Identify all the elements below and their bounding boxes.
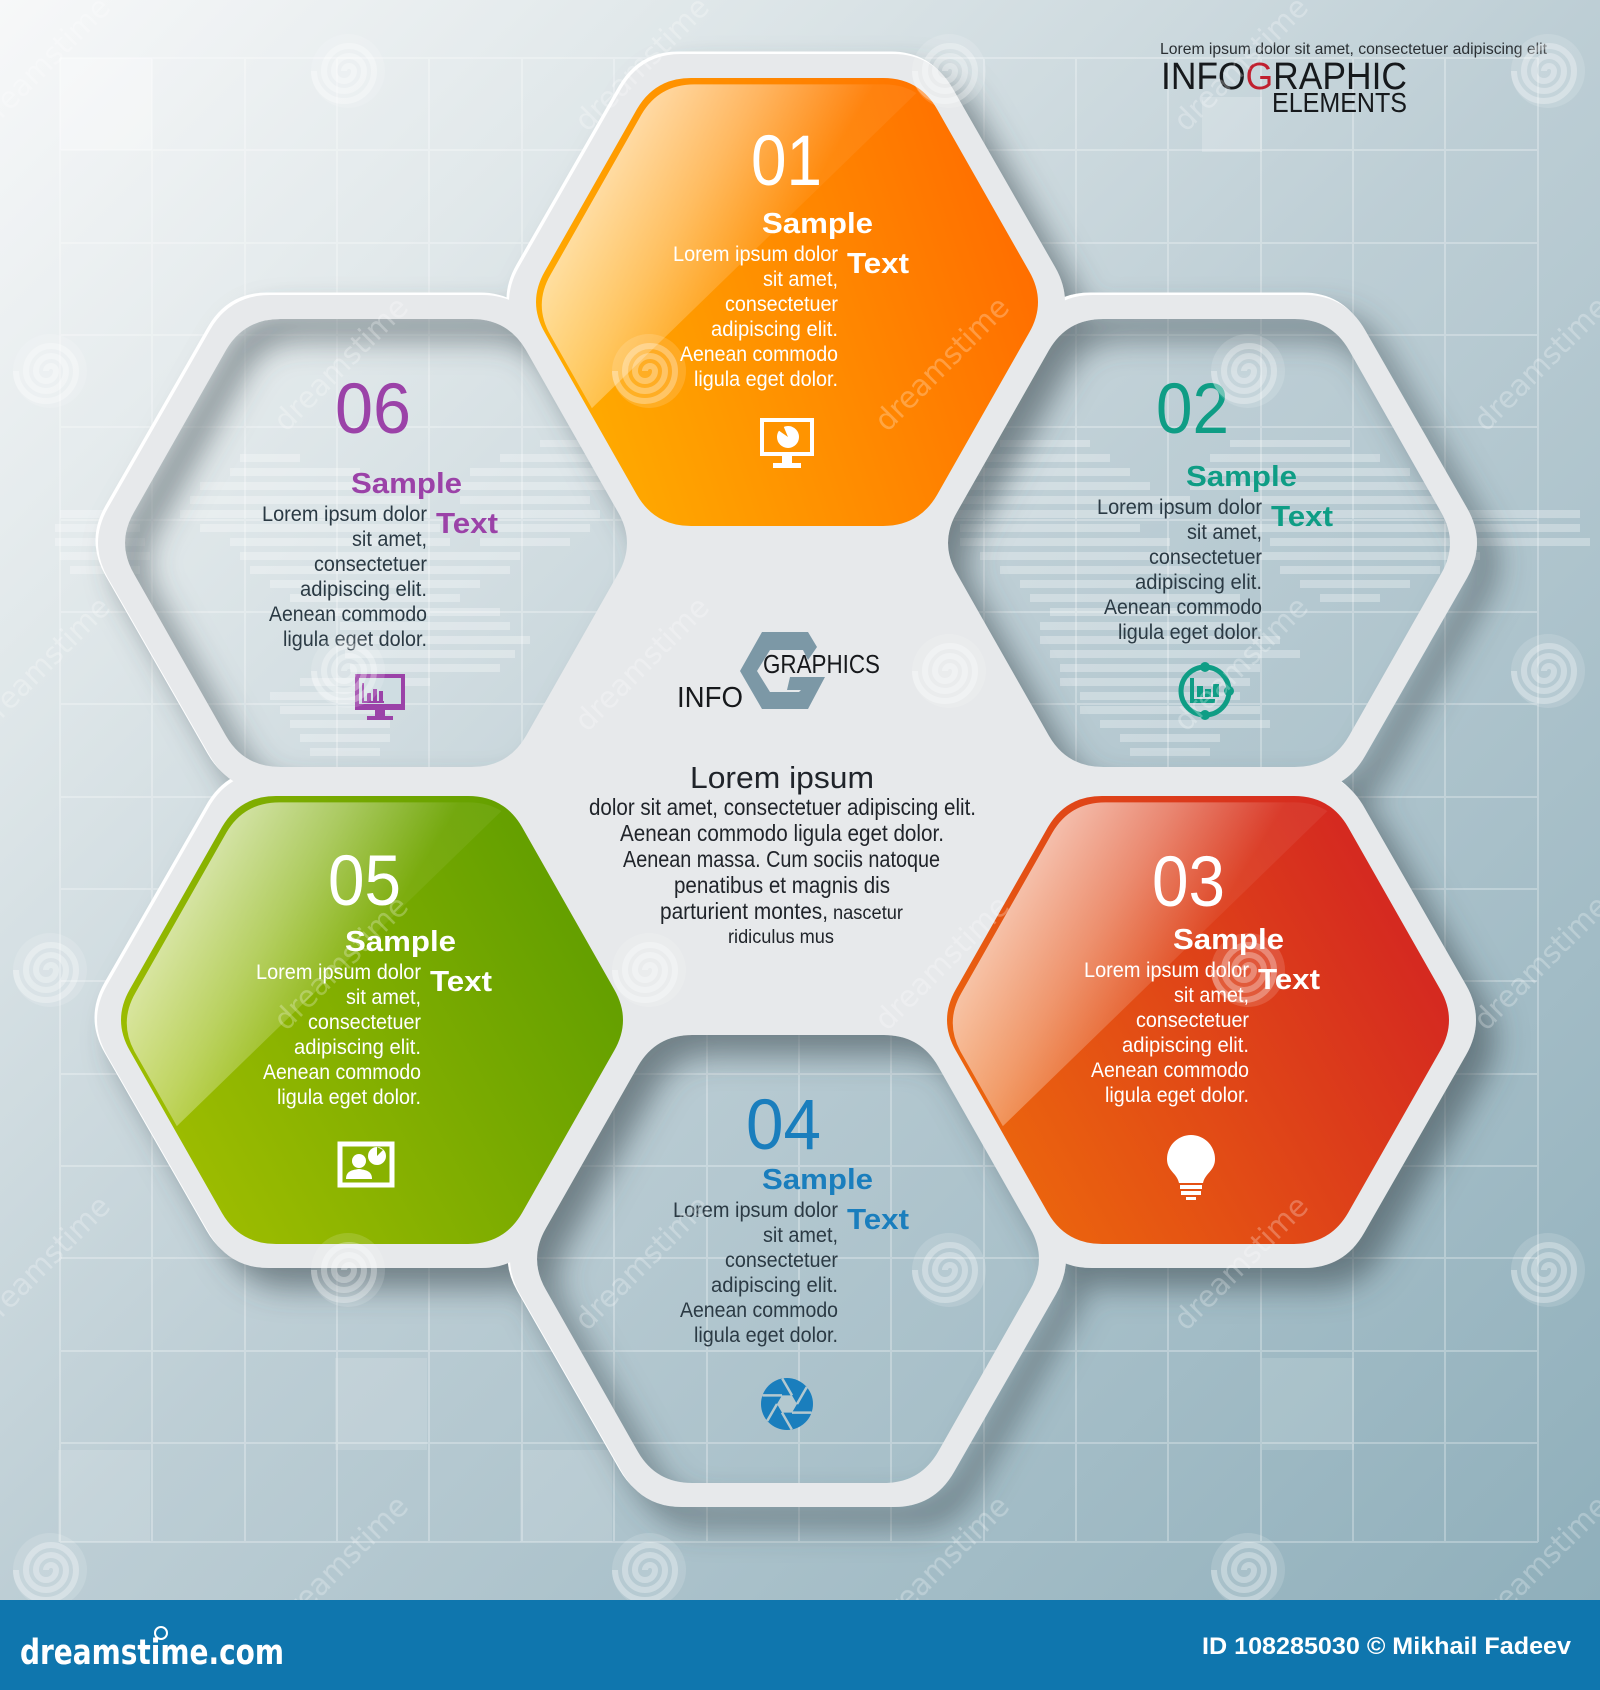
panel 02 text: Text: [1271, 501, 1333, 533]
panel 03 text: Aenean commodo: [1091, 1059, 1249, 1082]
center logo: INFO: [677, 682, 743, 714]
panel 04 text: adipiscing elit.: [711, 1274, 838, 1297]
watermark text: dreamstime: [868, 1489, 1017, 1638]
panel 06 text: consectetuer: [314, 553, 427, 576]
watermark text: dreamstime: [267, 889, 416, 1038]
panel 04 text: Lorem ipsum dolor: [673, 1199, 838, 1222]
panel 04 text: sit amet,: [763, 1224, 838, 1247]
panel 02 text: Aenean commodo: [1104, 596, 1262, 619]
panel 06 text: adipiscing elit.: [300, 578, 427, 601]
icon: monitor with bar chart: [355, 674, 405, 720]
panel 06 text: ligula eget dolor.: [283, 628, 427, 651]
orange hexagon: [536, 78, 1038, 526]
world map stripes: [55, 440, 1590, 756]
panel 01 text: Aenean commodo: [680, 343, 838, 366]
panel 02 text: sit amet,: [1187, 521, 1262, 544]
top right title: Lorem ipsum dolor sit amet, consectetuer adipiscing elit: [1160, 41, 1548, 58]
panel 02 text: ligula eget dolor.: [1118, 621, 1262, 644]
panel 05 text: Text: [430, 966, 492, 998]
panel 06 text: sit amet,: [352, 528, 427, 551]
panel 05 text: ligula eget dolor.: [277, 1086, 421, 1109]
panel 01 text: adipiscing elit.: [711, 318, 838, 341]
panel 03 text: adipiscing elit.: [1122, 1034, 1249, 1057]
panel 05 text: Lorem ipsum dolor: [256, 961, 421, 984]
panel 06 text: 06: [335, 370, 411, 449]
watermark text: dreamstime: [868, 290, 1017, 439]
panel 03 text: ligula eget dolor.: [1105, 1084, 1249, 1107]
footer bar: dreamstime.com: [20, 1633, 284, 1673]
watermark text: dreamstime: [267, 1489, 416, 1638]
panel 05 text: sit amet,: [346, 986, 421, 1009]
panel 01 text: ligula eget dolor.: [694, 368, 838, 391]
panel 01 text: 01: [751, 122, 822, 201]
panel 01 text: [673, 122, 909, 391]
panel 03 text: consectetuer: [1136, 1009, 1249, 1032]
panel 04 text: Sample: [762, 1164, 873, 1196]
icon: camera aperture: [761, 1378, 813, 1430]
watermark text: dreamstime: [868, 889, 1017, 1038]
panel 02 text: adipiscing elit.: [1135, 571, 1262, 594]
center text block: dolor sit amet, consectetuer adipiscing elit.: [589, 794, 976, 820]
center text block: Aenean massa. Cum sociis natoque: [623, 846, 940, 872]
top right title: ELEMENTS: [1272, 87, 1407, 118]
center text block: nascetur: [833, 903, 904, 924]
panel 05 text: consectetuer: [308, 1011, 421, 1034]
panel 02 text: Lorem ipsum dolor: [1097, 496, 1262, 519]
green hexagon: [121, 796, 623, 1244]
watermark text: dreamstime: [1167, 590, 1316, 739]
center text block: Aenean commodo ligula eget dolor.: [620, 820, 944, 846]
panel 02 text: Sample: [1186, 461, 1297, 493]
panel 02 text: [1097, 370, 1333, 644]
icon: light bulb: [1167, 1135, 1215, 1200]
panel 01 text: Sample: [762, 208, 873, 240]
center text block: [589, 760, 976, 948]
icon: presenter with pie chart: [340, 1144, 392, 1185]
top right title: INFOGRAPHIC: [1161, 56, 1407, 98]
panel 01 text: consectetuer: [725, 293, 838, 316]
panel 05 text: 05: [328, 842, 401, 921]
panel 05 text: Sample: [345, 926, 456, 958]
watermark text: dreamstime: [568, 590, 717, 739]
footer bar: [0, 1600, 1600, 1690]
watermark text: dreamstime: [267, 290, 416, 439]
panel 03 text: 03: [1152, 843, 1225, 922]
watermark text: dreamstime: [568, 1189, 717, 1338]
panel 03 text: [1084, 843, 1320, 1107]
panel 05 text: Aenean commodo: [263, 1061, 421, 1084]
panel 01 text: Text: [847, 248, 909, 280]
panel 03 text: Lorem ipsum dolor: [1084, 959, 1249, 982]
icon: monitor with pie chart: [760, 418, 814, 468]
top right title: [1160, 41, 1548, 118]
panel 03 text: Text: [1258, 964, 1320, 996]
panel 02 text: 02: [1156, 370, 1229, 449]
icon: ring with bar chart: [1181, 662, 1234, 720]
watermark text: dreamstime: [1167, 1189, 1316, 1338]
red hexagon: [947, 796, 1449, 1244]
panel 04 text: Aenean commodo: [680, 1299, 838, 1322]
panel 03 text: sit amet,: [1174, 984, 1249, 1007]
center logo: GRAPHICS: [763, 649, 880, 679]
center text block: parturient montes,: [660, 898, 828, 924]
panel 04 text: [673, 1086, 909, 1347]
panel 04 text: consectetuer: [725, 1249, 838, 1272]
center text block: ridiculus mus: [728, 927, 834, 948]
panel 06 text: Aenean commodo: [269, 603, 427, 626]
panel 02 text: consectetuer: [1149, 546, 1262, 569]
footer bar: ID 108285030 © Mikhail Fadeev: [1202, 1633, 1572, 1660]
panel 04 text: Text: [847, 1204, 909, 1236]
panel 01 text: Lorem ipsum dolor: [673, 243, 838, 266]
panel 06 text: Sample: [351, 468, 462, 500]
hexagon frame: [94, 52, 1477, 1507]
center text block: penatibus et magnis dis: [674, 872, 890, 898]
panel 05 text: adipiscing elit.: [294, 1036, 421, 1059]
panel 05 text: [256, 842, 492, 1109]
panel 06 text: Lorem ipsum dolor: [262, 503, 427, 526]
panel 04 text: 04: [746, 1086, 821, 1165]
panel 06 text: [262, 370, 498, 651]
panel 03 text: Sample: [1173, 924, 1284, 956]
panel 01 text: sit amet,: [763, 268, 838, 291]
center text block: Lorem ipsum: [690, 760, 874, 795]
panel 06 text: Text: [436, 508, 498, 540]
panel 04 text: ligula eget dolor.: [694, 1324, 838, 1347]
center logo: [677, 632, 880, 714]
